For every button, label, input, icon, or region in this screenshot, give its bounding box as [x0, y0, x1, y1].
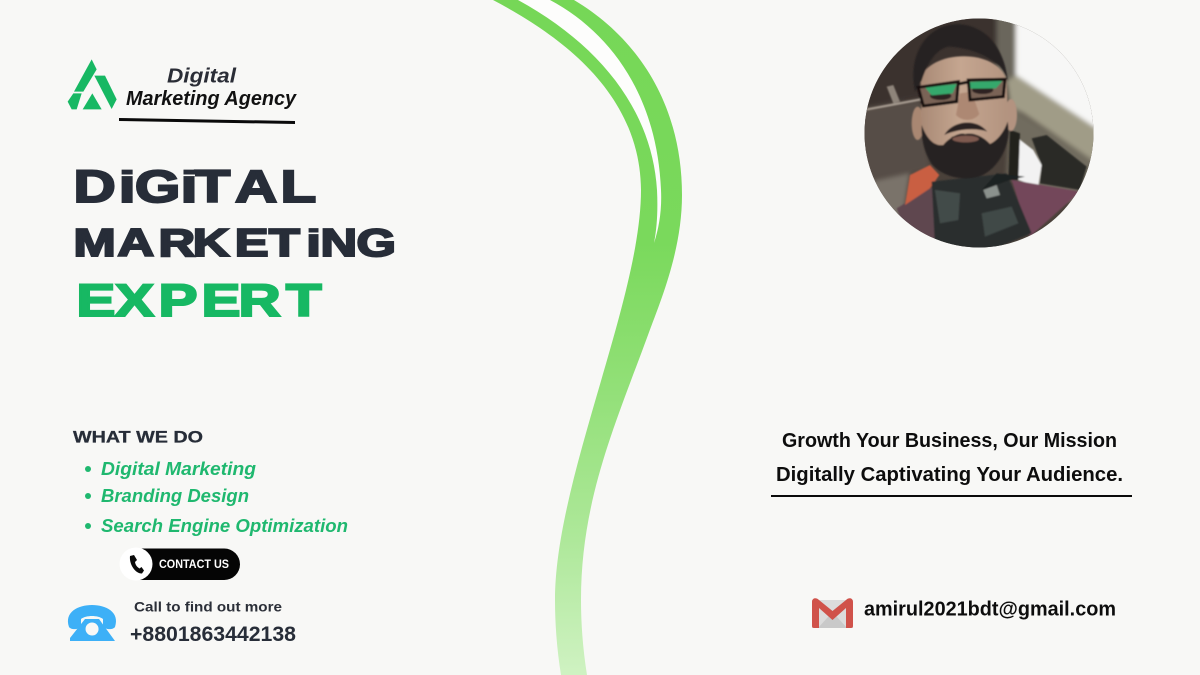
profile photo	[864, 18, 1094, 248]
mouth	[952, 136, 979, 142]
jacket	[1012, 180, 1080, 237]
heading: what we do: WHAT WE DO	[73, 428, 203, 446]
title line: MARKETING: MARKETING	[73, 221, 396, 265]
bullet: digital marketing: Digital Marketing	[101, 459, 256, 479]
bullet: branding design: Branding Design	[101, 486, 249, 506]
tagline	[771, 430, 1132, 497]
glasses frame	[918, 79, 1005, 106]
email contact	[812, 598, 1116, 628]
phone number: +8801863442138	[130, 623, 296, 646]
logo	[68, 59, 297, 124]
title	[73, 162, 396, 326]
what we do	[73, 428, 348, 536]
call info	[68, 598, 296, 646]
bullet: search engine optimization: Search Engine Optimization	[101, 516, 348, 536]
beard	[922, 122, 1008, 178]
eyes	[930, 92, 951, 100]
icon: handset	[130, 555, 144, 574]
ears	[912, 107, 924, 140]
lens tint	[925, 84, 957, 95]
collar	[905, 165, 939, 205]
tagline line 1: Growth Your Business, Our Mission	[782, 430, 1117, 452]
title line: EXPERT: EXPERT	[76, 276, 322, 326]
logo text: Marketing Agency: Marketing Agency	[126, 88, 297, 110]
shirt	[932, 173, 1032, 253]
tagline line 2: Digitally Captivating Your Audience.	[776, 464, 1123, 486]
icon: gmail	[812, 598, 853, 628]
contact button: CONTACT US	[159, 559, 229, 571]
logo underline	[119, 118, 295, 124]
swoosh white inner	[518, 0, 661, 243]
email address: amirul2021bdt@gmail.com	[864, 598, 1116, 620]
face	[920, 55, 1008, 146]
icon: telephone	[68, 605, 116, 641]
title line: DIGITAL: DIGITAL	[73, 162, 316, 212]
call label: Call to find out more	[134, 598, 282, 614]
moustache	[944, 122, 987, 135]
logo icon	[68, 59, 117, 109]
contact button	[120, 548, 240, 580]
hair	[913, 24, 1008, 92]
lenses	[918, 82, 958, 106]
logo text: Digital: Digital	[167, 66, 236, 88]
green swoosh	[493, 0, 682, 675]
tagline underline	[771, 495, 1132, 497]
nose	[956, 92, 979, 120]
